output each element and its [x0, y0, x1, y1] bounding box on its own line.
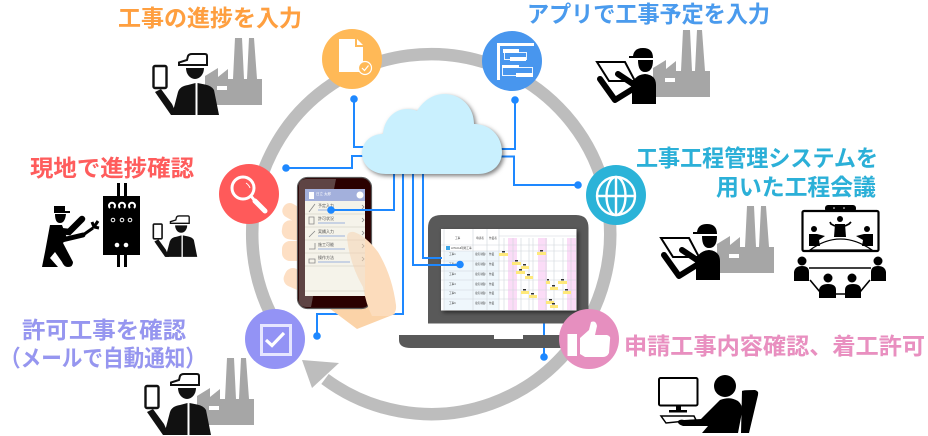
phone screen: 予定入力: [318, 202, 334, 208]
icon: red magnifier: [219, 164, 279, 224]
schedule table on screen: 作業: [489, 262, 495, 266]
schedule table on screen: 作業: [489, 272, 495, 276]
phone screen: 日立 太郎: [316, 191, 331, 196]
smartphone held in hand: [280, 172, 396, 329]
video screen: [802, 205, 878, 251]
schedule table on screen: 電気制御: [475, 291, 486, 295]
hand: fingers and palm: [280, 200, 395, 329]
small worker with phone: [153, 216, 197, 257]
worker with tablet and factory (top right): [597, 30, 710, 104]
schedule table on screen: 作業: [489, 301, 495, 305]
office worker at computer: [659, 375, 758, 433]
phone screen: 操作方法: [318, 254, 334, 260]
schedule table on screen: 工事3: [449, 272, 456, 276]
icon: orange document: [322, 29, 382, 89]
schedule table on screen: 電気制御: [475, 272, 486, 276]
schedule table on screen: 電気制御: [475, 262, 486, 266]
laptop: [399, 172, 592, 348]
phone body: [298, 178, 372, 308]
worker with phone and factory (top left): [154, 38, 262, 115]
icon: cyan globe: [586, 165, 646, 225]
schedule table on screen: 工事: [455, 236, 461, 240]
kneeling technician: [42, 206, 99, 267]
schedule table on screen: 電気制御: [475, 282, 486, 286]
heading: on-site check: 現地で進捗確認: [30, 155, 194, 181]
schedule table on screen: 作業: [489, 252, 495, 256]
schedule table on screen: [441, 229, 576, 310]
schedule table on screen: 工事2: [449, 262, 456, 266]
phone screen: [305, 189, 365, 296]
schedule table on screen: 電気制御: [475, 252, 486, 256]
worker with phone and factory (bottom left): [146, 358, 254, 435]
meeting participants: [794, 256, 886, 298]
heading: application review: 申請工事内容確認、着工許可: [624, 333, 925, 359]
schedule table on screen: 工事5: [449, 291, 456, 295]
heading: schedule meeting line 2: 用いた工程会議: [716, 174, 876, 200]
conference room with video call: [794, 205, 886, 298]
connector lines: [282, 95, 582, 361]
schedule table on screen: 工事4: [449, 282, 456, 286]
schedule table on screen: 工事1: [449, 252, 456, 256]
schedule table on screen: 電気制御: [475, 301, 486, 305]
phone screen: 許可状況: [318, 215, 334, 221]
heading: confirm permitted work line 2: （メールで自動通知）: [0, 345, 206, 371]
schedule table on screen: 作業: [489, 282, 495, 286]
schedule table on screen: 工事6: [449, 301, 456, 305]
phone screen: 施工可能: [318, 241, 334, 247]
phone screen: 実績入力: [318, 228, 334, 234]
heading: progress input: 工事の進捗を入力: [118, 5, 302, 31]
schedule table on screen: 作業: [489, 291, 495, 295]
technician repairing electrical panel: [42, 183, 140, 267]
icon: blue gantt chart: [482, 31, 542, 91]
heading: schedule meeting line 1: 工事工程管理システムを: [636, 145, 878, 171]
progress ring with arrow: [252, 54, 610, 414]
icon: pink thumbs up: [559, 309, 619, 369]
schedule table on screen: 作業者: [489, 236, 497, 240]
schedule table on screen: HITACHI現場工事: [451, 246, 472, 250]
heading: confirm permitted work line 1: 許可工事を確認: [22, 317, 186, 343]
thumb over the phone: [347, 232, 396, 316]
heading: schedule input by app: アプリで工事予定を入力: [527, 1, 770, 27]
electrical panel: [103, 183, 140, 267]
icon: purple checkbox: [245, 309, 305, 369]
schedule table on screen: 申請者: [476, 236, 484, 240]
worker with tablet and factory (middle right): [661, 206, 774, 280]
cloud: [362, 94, 502, 174]
